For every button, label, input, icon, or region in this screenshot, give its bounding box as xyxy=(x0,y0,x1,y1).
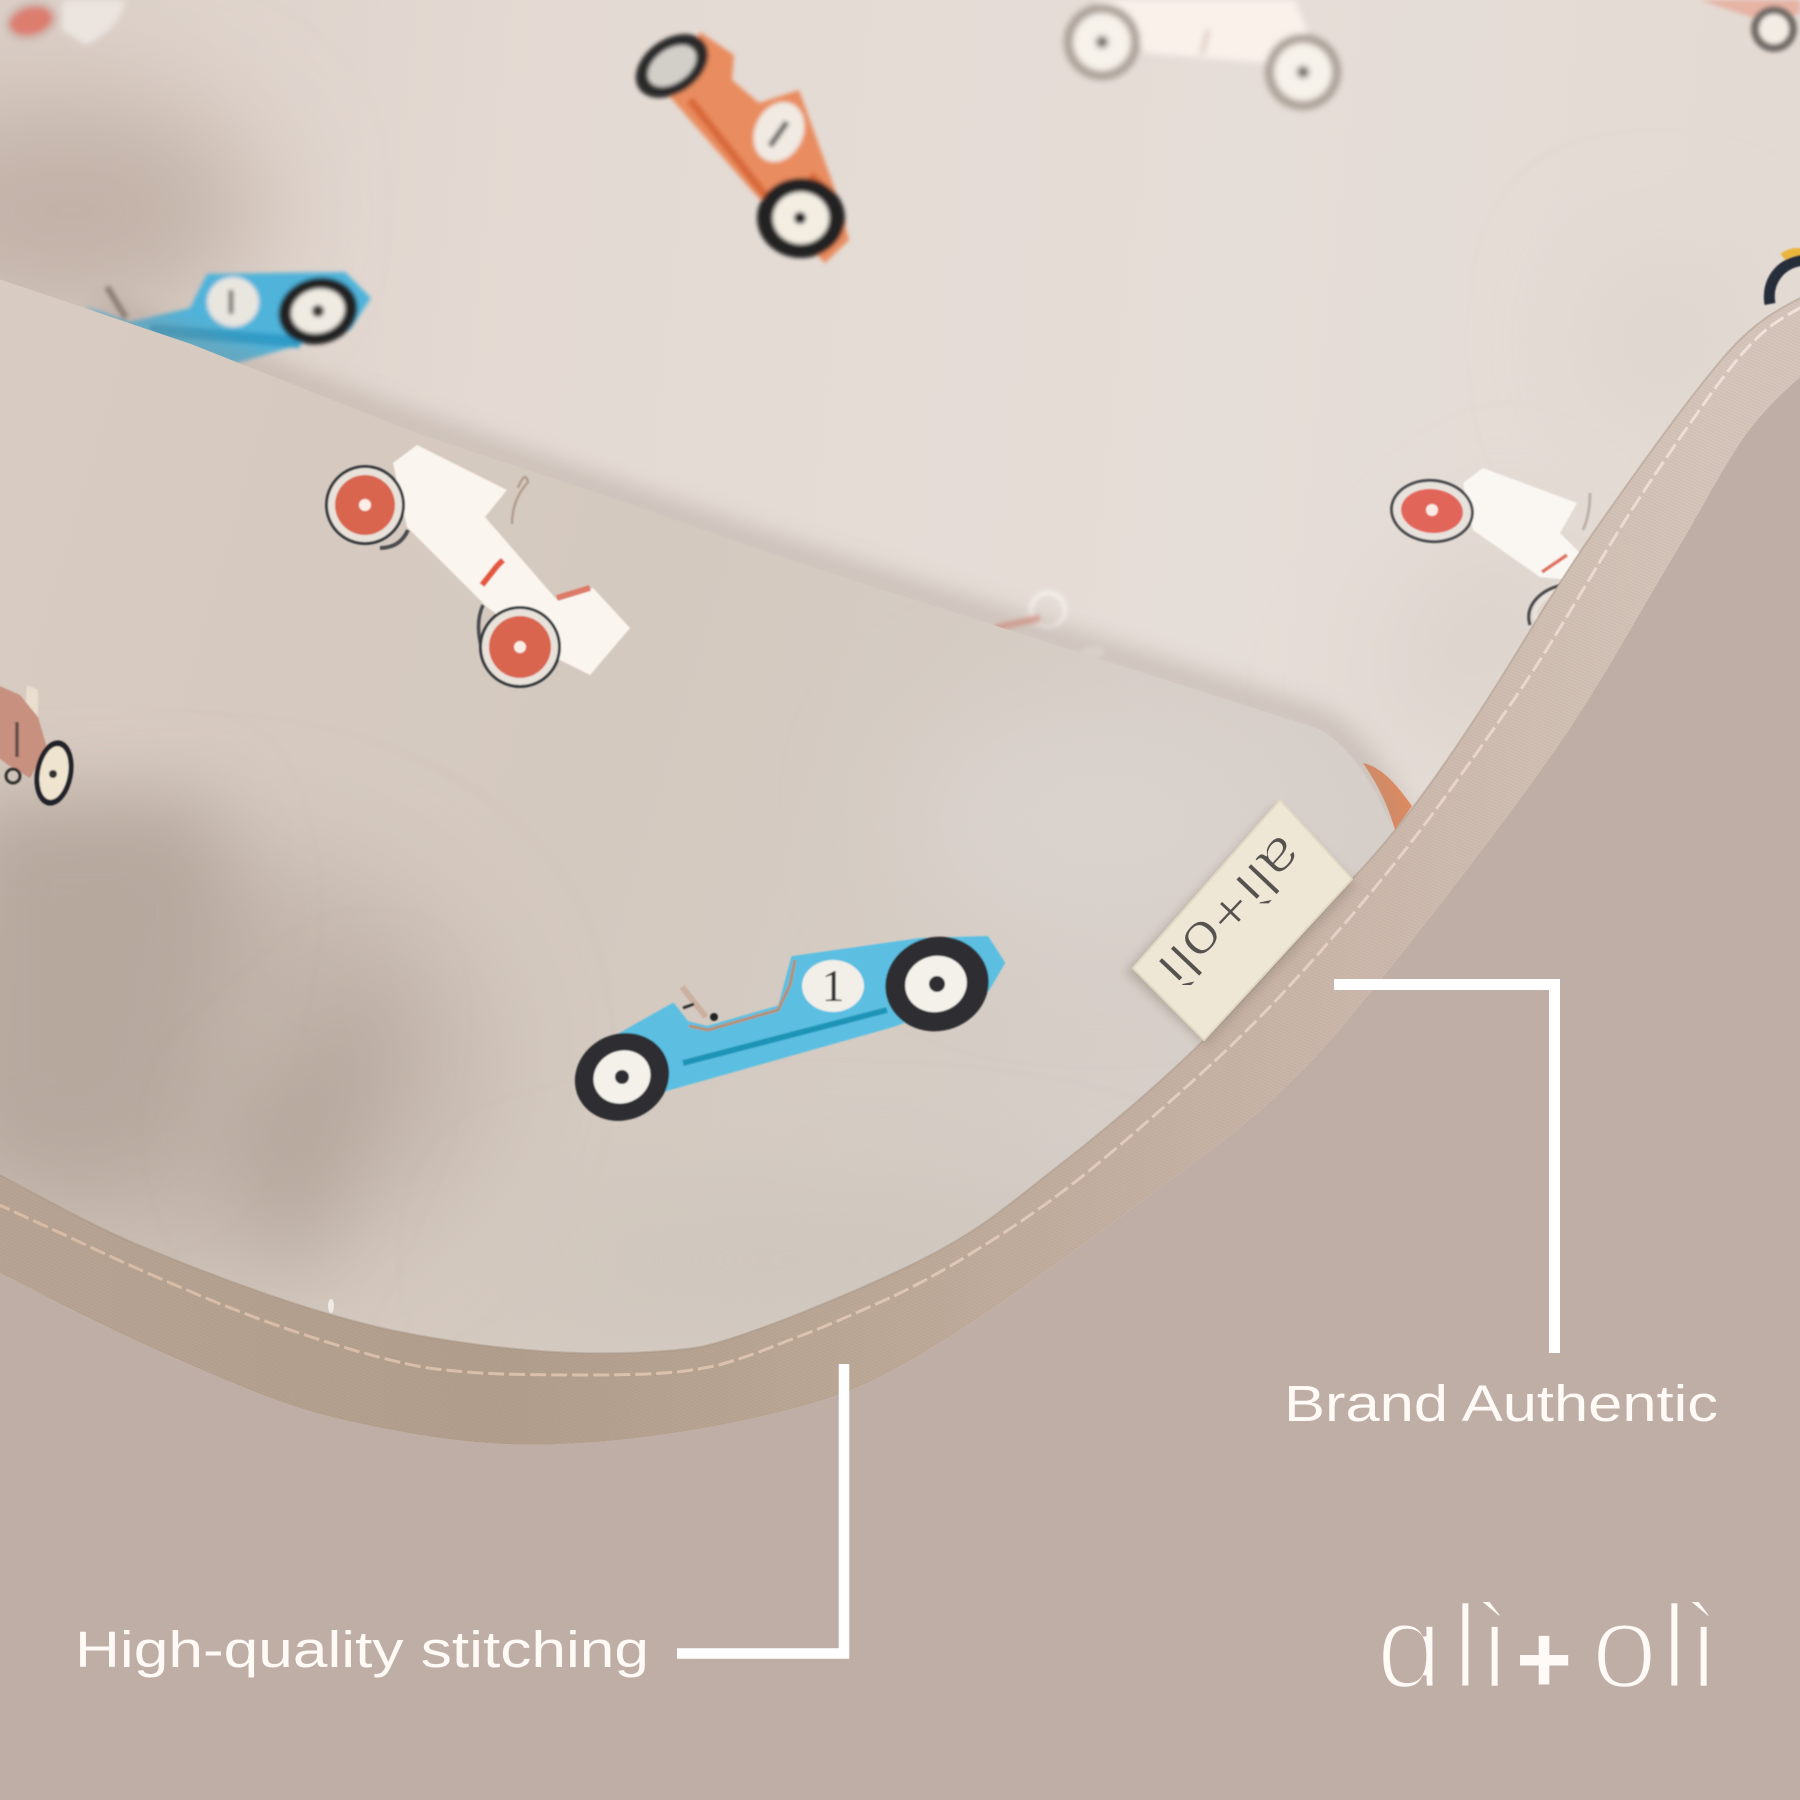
tag text: alì+olì xyxy=(1145,824,1318,1001)
car: faint car behind flap xyxy=(995,593,1105,658)
car: top-right xyxy=(1700,0,1800,52)
car: top-left white xyxy=(0,0,125,47)
car: blue racer on flap: 1 xyxy=(822,960,844,1011)
car: red left edge on flap xyxy=(0,684,78,809)
brand tag xyxy=(1125,800,1356,1046)
callout line: High-quality stitching xyxy=(677,1364,844,1654)
car: blue racer on flap xyxy=(574,935,1006,1122)
speck highlight xyxy=(328,1299,334,1313)
callout line: Brand Authentic xyxy=(1334,984,1554,1353)
car: white right xyxy=(1387,468,1590,625)
logo wordmark right: o xyxy=(1591,1580,1658,1714)
logo wordmark right: l xyxy=(1661,1580,1688,1714)
car: blue upper partly hidden by flap xyxy=(84,269,371,365)
flap shadow xyxy=(100,310,1398,830)
car: top white xyxy=(1064,0,1341,110)
car: white on flap xyxy=(325,445,630,688)
logo wordmark right: ì xyxy=(1687,1580,1720,1714)
binding trim xyxy=(0,292,1800,1445)
car: right edge wheel arc xyxy=(1769,252,1800,304)
callout label: High-quality stitching: High-quality stitching xyxy=(75,1621,649,1678)
brand logo xyxy=(1376,1580,1720,1714)
pocket flap xyxy=(0,280,1388,1353)
car: orange upper xyxy=(624,21,849,263)
logo wordmark left: ì xyxy=(1478,1580,1511,1714)
logo wordmark left: ɑ xyxy=(1376,1580,1443,1714)
car fragment: orange sliver xyxy=(1363,763,1412,830)
logo plus: + xyxy=(1516,1606,1572,1713)
callout label: Brand Authentic: Brand Authentic xyxy=(1284,1375,1718,1432)
logo wordmark left: l xyxy=(1452,1580,1479,1714)
stitching line xyxy=(0,305,1800,1375)
